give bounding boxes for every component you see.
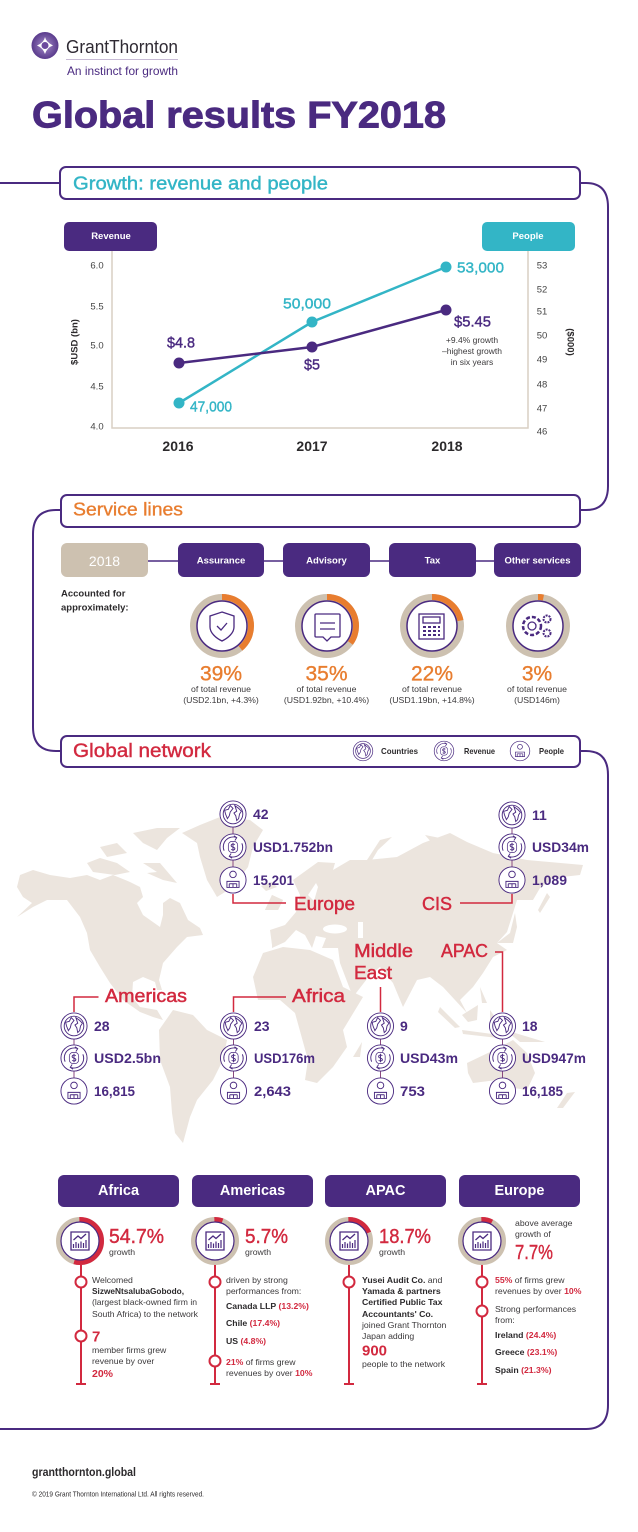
panel: Americas growth: US (4.8%): [226, 1336, 266, 1346]
region: APAC: [441, 941, 586, 1104]
left axis labels: [90, 260, 104, 432]
region: Americas: 16,815: [94, 1083, 135, 1099]
left axis labels: 6.0: [90, 260, 104, 272]
legend: Revenue: [464, 746, 495, 756]
icon: logo swirl: [32, 32, 58, 59]
label: Europe: [294, 894, 355, 914]
heading: Global network: Global network: [73, 740, 211, 762]
stat: [109, 1226, 164, 1257]
data labels: [167, 260, 504, 416]
left axis labels: 5.0: [90, 340, 104, 352]
region: CIS: USD34m: [532, 839, 589, 855]
stat: 3%: (USD146m): [514, 695, 560, 705]
line: revenue: [174, 304, 452, 368]
badge: Tax: [389, 543, 476, 577]
region: Middle East: 753: [400, 1083, 425, 1099]
annotation: highest growth: –highest growth: [442, 346, 502, 356]
stat: 3%: 3%: [522, 662, 552, 686]
panel: Europe growth: above average: [515, 1218, 573, 1228]
right axis labels: [537, 260, 547, 438]
stat: 22%: (USD1.19bn, +14.8%): [389, 695, 475, 705]
right axis labels: 51: [537, 306, 547, 318]
donut: Advisory 35%: [298, 597, 356, 655]
text: accounted for: approximately:: [61, 602, 129, 614]
donut 5.7%: [194, 1220, 236, 1262]
panel: APAC growth: 900: [362, 1342, 387, 1360]
panel: Africa growth: [58, 1175, 199, 1384]
annotation: highest growth: in six years: [451, 357, 493, 367]
panel: Americas growth: [192, 1175, 313, 1384]
panel: Europe growth: Strong performances: [495, 1304, 577, 1314]
left axis labels: 4.0: [90, 422, 104, 432]
timeline: [76, 1262, 86, 1384]
badge: Assurance: Assurance: [197, 556, 245, 566]
panel: APAC growth: growth: [379, 1247, 405, 1257]
panel: Americas growth: revenues by over 10%: [226, 1368, 313, 1378]
footer: [32, 1467, 204, 1498]
text: accounted for: [61, 588, 129, 614]
right axis labels: 48: [537, 380, 547, 390]
panel: Europe growth: 55% of firms grew: [495, 1275, 565, 1285]
panel: APAC growth: [325, 1175, 447, 1384]
panel: Americas growth: Canada LLP (13.2%): [226, 1301, 309, 1311]
icon: speech note: [315, 614, 340, 641]
stat: 35%: 35%: [305, 662, 348, 686]
footer: © 2019 Grant Thornton International Ltd. All rights reserved.: [32, 1490, 204, 1498]
connector lines between sections: [0, 183, 608, 1429]
icon: shield: [210, 612, 234, 641]
logo: Grant Thornton: An instinct for growth: [67, 64, 178, 78]
region: Middle East: USD43m: [400, 1050, 458, 1066]
legend: People: [539, 746, 564, 756]
region: Middle East: [354, 941, 458, 1104]
badge: [58, 1175, 179, 1207]
badge: 2018: [61, 543, 148, 577]
badge: Revenue: [64, 222, 157, 251]
panel: APAC growth: Yamada & partners: [362, 1286, 441, 1296]
region: CIS: 1,089: [532, 872, 567, 888]
callout line: [233, 894, 286, 903]
panel: APAC growth: 18.7%: [379, 1226, 431, 1248]
region: Africa: [220, 986, 346, 1104]
region: APAC: 16,185: [522, 1083, 563, 1099]
heading: Growth: revenue and people: [60, 167, 580, 199]
stat: 54.7%: [109, 1226, 164, 1248]
donut 18.7%: [328, 1220, 370, 1262]
stat: 39%: 39%: [200, 662, 242, 686]
panel: Americas growth: performances from:: [226, 1286, 301, 1296]
logo: Grant Thornton: [32, 32, 178, 78]
right axis labels: 50: [537, 330, 547, 342]
left axis title: $USD (bn): [70, 319, 80, 365]
panel: APAC growth: people to the network: [362, 1359, 446, 1369]
data labels: 47,000: [190, 398, 232, 416]
region: Europe: USD1.752bn: [253, 839, 333, 855]
year labels: 2016: [162, 438, 194, 454]
stat: 22%: of total revenue: [402, 684, 462, 694]
data labels: 50,000: [283, 296, 331, 312]
chart axes: [112, 251, 528, 428]
panel: APAC growth: joined Grant Thornton: [361, 1320, 447, 1330]
right axis labels: 46: [537, 426, 547, 438]
right axis labels: 53: [537, 260, 547, 272]
panel: Europe growth: 7.7%: [515, 1242, 553, 1264]
year labels: 2018: [431, 438, 463, 454]
stat: 35%: of total revenue: [297, 684, 357, 694]
region: Africa: Africa: [292, 986, 346, 1006]
annotation: highest growth: +9.4% growth: [446, 335, 498, 345]
text: Welcomed: [92, 1275, 133, 1285]
text: 20%: [92, 1368, 114, 1380]
stat: 39%: [183, 662, 259, 705]
region: Americas: [61, 986, 187, 1104]
region: CIS: CIS: [422, 894, 452, 914]
badge: 2018: 2018: [89, 553, 120, 569]
stat: 22%: 22%: [411, 662, 453, 686]
region: Europe: 42: [253, 806, 269, 822]
left axis labels: 5.5: [90, 302, 104, 312]
annotation: highest growth: [442, 335, 502, 367]
panel: Americas growth: growth: [245, 1247, 271, 1257]
year labels: 2017: [296, 438, 328, 454]
year labels: [162, 438, 463, 454]
logo: Grant Thornton: GrantThornton: [66, 37, 178, 57]
region: APAC: 18: [522, 1018, 538, 1034]
stat: 22%: [389, 662, 475, 705]
legend: Countries: [381, 746, 418, 756]
region: Africa: USD176m: [254, 1050, 315, 1066]
icon: calculator: [419, 614, 444, 639]
badge: People: People: [512, 231, 544, 242]
heading: Global network: [61, 736, 580, 767]
stat: growth: [109, 1247, 135, 1257]
left axis labels: 4.5: [90, 382, 104, 392]
right axis labels: 49: [537, 354, 547, 366]
data labels: $4.8: [167, 334, 195, 352]
text: (largest black-owned firm in: [92, 1297, 197, 1307]
stat: 39%: of total revenue: [191, 684, 251, 694]
panel: Europe growth: growth of: [515, 1229, 551, 1239]
region: CIS: 11: [532, 807, 547, 823]
text: member firms grew: [92, 1345, 167, 1355]
badge: Tax: Tax: [425, 556, 441, 566]
region: APAC: APAC: [441, 941, 488, 961]
panel: Europe growth: revenues by over 10%: [495, 1286, 582, 1296]
text: SizweNtsalubaGobodo,: [92, 1286, 184, 1296]
badge: People: [482, 222, 575, 251]
badge: Assurance: [178, 543, 264, 577]
stat: 39%: (USD2.1bn, +4.3%): [183, 695, 259, 705]
data labels: $5: [304, 356, 320, 374]
icon: gears: [523, 616, 550, 636]
donut: Other services 3%: [509, 597, 567, 655]
donut 54.7%: [58, 1220, 102, 1262]
text: 7: [92, 1328, 100, 1346]
panel: Americas growth: 5.7%: [245, 1226, 288, 1248]
badge: Advisory: Advisory: [306, 556, 348, 566]
region: Middle East: Middle: [354, 941, 413, 961]
panel: APAC growth: Certified Public Tax: [362, 1297, 443, 1307]
heading: Growth: revenue and people: Growth: revenue and people: [73, 172, 328, 194]
heading: Service lines: [61, 495, 580, 527]
right axis title: ($000): [564, 328, 576, 356]
region: Middle East: 9: [400, 1018, 408, 1034]
heading: Service lines: Service lines: [73, 498, 183, 520]
panel: Europe growth: Greece (23.1%): [495, 1347, 557, 1357]
panel: Europe growth: Europe: [495, 1183, 544, 1199]
region: Middle East: East: [354, 963, 392, 983]
title: Global results FY2018: [32, 94, 446, 136]
world map: [17, 817, 583, 1143]
region: Africa: 23: [254, 1018, 270, 1034]
region: Africa: 2,643: [254, 1083, 291, 1099]
region: Americas: 28: [94, 1018, 110, 1034]
right axis labels: 47: [537, 404, 547, 414]
text: accounted for: Accounted for: [61, 588, 126, 600]
panel: Americas growth: Americas: [220, 1183, 285, 1199]
data labels: 53,000: [457, 260, 504, 276]
panel: growth line chart: [64, 222, 576, 454]
panel: APAC growth: Accountants' Co.: [362, 1309, 433, 1319]
badge: Other services: [494, 543, 581, 577]
region: Europe: 15,201: [253, 872, 294, 888]
legend: [353, 741, 564, 761]
panel: Europe growth: Spain (21.3%): [495, 1365, 552, 1375]
panel: Americas growth: driven by strong: [226, 1275, 288, 1285]
badge: Advisory: [283, 543, 370, 577]
text: South Africa) to the network: [92, 1309, 199, 1319]
donut 7.7%: [460, 1220, 504, 1262]
panel: APAC growth: APAC: [365, 1183, 406, 1199]
stat: 3%: [507, 662, 567, 705]
region: Americas: USD2.5bn: [94, 1050, 161, 1066]
text: [92, 1275, 199, 1380]
panel: Europe growth: [459, 1175, 582, 1384]
badge: Africa: [98, 1183, 140, 1199]
donut: Tax 22%: [403, 597, 461, 655]
line: people: [174, 262, 452, 408]
panel: Americas growth: Chile (17.4%): [226, 1318, 280, 1328]
region: Europe: [220, 801, 355, 914]
stat: 35%: (USD1.92bn, +10.4%): [284, 695, 369, 705]
text: revenue by over: [92, 1356, 154, 1366]
footer: grantthornton.global: [32, 1467, 136, 1479]
donut: Assurance 39%: [193, 597, 251, 655]
stat: 35%: [284, 662, 369, 705]
data labels: $5.45: [454, 314, 491, 330]
panel: Americas growth: 21% of firms grew: [226, 1357, 296, 1367]
right axis labels: 52: [537, 284, 547, 296]
panel: APAC growth: Japan adding: [362, 1331, 414, 1341]
panel: Europe growth: from:: [495, 1315, 515, 1325]
badge: Revenue: Revenue: [91, 231, 131, 242]
stat: 3%: of total revenue: [507, 684, 567, 694]
panel: Europe growth: Ireland (24.4%): [495, 1330, 556, 1340]
panel: APAC growth: Yusei Audit Co. and: [362, 1275, 442, 1285]
badge: Other services: Other services: [504, 556, 571, 566]
panel: service lines: [61, 543, 581, 705]
region: Americas: Americas: [105, 986, 187, 1006]
region: CIS: [422, 802, 589, 914]
region: APAC: USD947m: [522, 1050, 586, 1066]
